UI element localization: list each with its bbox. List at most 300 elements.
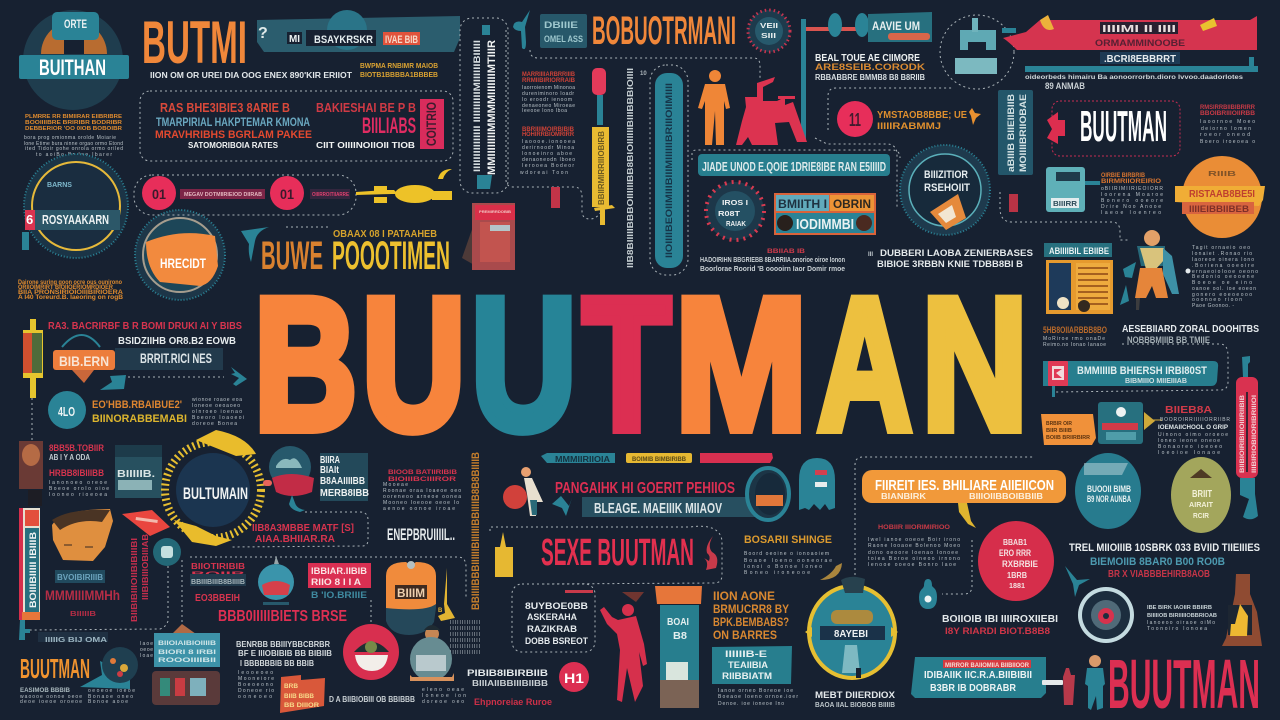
banner: teal bottom: MIRROR BAIIOMIIA BIIBIIOOR <box>945 663 1030 669</box>
text block: red column: Boeoe oroIo oioe <box>49 486 109 492</box>
text block: tiny under teal note <box>718 688 798 707</box>
text block: yellow lines: BIOTB1BBBBA1BBBEB <box>360 72 438 79</box>
text block: left column: lo eroodr ienoom <box>522 97 572 103</box>
bar: three colour label: BOIMIB BIMBIRIBB <box>632 457 687 463</box>
text block: red and grey left centre: EO3BBEIH <box>195 593 240 604</box>
figure: orange man <box>698 70 730 145</box>
main title: BUUTMAN: T <box>583 260 671 469</box>
poster: ABIIIIBIL <box>1044 243 1113 314</box>
icon: teal temple with shop: ROOOIIIIBII <box>158 658 217 664</box>
connector to circle <box>815 138 897 207</box>
banner: teal strip with icon: BMMIIIIB BHIERSH IRBI80ST <box>1077 365 1207 377</box>
panel: dashed statistics: MRAVHRIBHS BGRLAM PAKEE <box>155 129 312 141</box>
text block: yellow lines <box>360 63 438 79</box>
heading: BUWE POOOTIMEN <box>241 227 450 278</box>
bottom label: red H1 circle: BIIIAIIBBIIIBIIBB <box>472 679 548 688</box>
text block: right column: RMSIRRBIIBIBRIRR <box>1200 105 1256 111</box>
text block: person caption: Paoe Goonoo. - <box>1192 303 1234 309</box>
panel: dashed statistics <box>140 91 453 161</box>
text block: AESEBIIARD <box>1122 324 1259 345</box>
text block: left column: derirnoodr Minoa <box>522 145 574 151</box>
text block: orange tiny heading: Reimo.no Ionao Ianaoe <box>1043 342 1106 348</box>
heading: PANGAIHK: BLEAGE. MAEIIIK MIIAOV <box>594 500 722 517</box>
circle label: 4LO: 4LO <box>58 404 75 419</box>
photo panel <box>115 445 162 498</box>
badge: red circle <box>978 521 1054 601</box>
tag: orange with dome <box>53 335 115 383</box>
badge: yellow ring: 8AYEBI <box>834 629 868 640</box>
dashed connector bubble <box>855 457 1035 580</box>
dumbbell label: AAVIE UM <box>872 19 920 33</box>
text block: person caption: Boeoe oe eino <box>1192 280 1252 286</box>
text block: BIIEB8A: Uinono oimo oroeoe <box>1158 432 1228 438</box>
main title: BUUTMAN: A <box>818 259 912 470</box>
text block: speech caption: HOBIIR IIIORIMIRIOO <box>878 525 950 531</box>
text block: person caption: Tagit ornaeio oeo <box>1192 245 1250 251</box>
icon: pencil column <box>551 68 615 225</box>
badge: olive circle: BRIIT <box>1192 489 1212 500</box>
starburst badge: RAIAK <box>726 221 746 228</box>
panel: dashed statistics: TMARPIRIAL HAKPTEMAR KMONA <box>156 115 310 129</box>
panel: dashed statistics: COITRIO <box>423 102 439 146</box>
dashed connector right <box>1000 192 1130 240</box>
connector to drop <box>942 540 972 594</box>
panel: dashed list: DOBB BSREOT <box>525 636 588 646</box>
main title: BUUTMAN: M <box>675 258 807 469</box>
text block: speech caption: Iwel ianoe ooeoe Boir irono <box>868 537 960 543</box>
text block: RA3 heading <box>48 321 242 370</box>
text block: person caption: ooonoeo rioon <box>1192 297 1242 303</box>
photo panel: BIIIIIB. <box>117 469 155 480</box>
speech bubble: orange: BIANBIRK <box>881 492 926 501</box>
icon: stick and figure <box>1042 655 1105 710</box>
text block: bottom left caption: waoooe oonoe oeoe <box>20 694 82 700</box>
vertical text strip <box>626 68 647 268</box>
figure: person at laptop <box>410 625 454 681</box>
text block: bottom centre: ooneoeo <box>238 694 272 700</box>
text block: left column <box>520 72 576 176</box>
badge: BUITHAN: ORTE <box>64 17 87 31</box>
dashed connector to red circle <box>370 600 372 628</box>
tag and pink strip <box>122 510 170 622</box>
badge: ROSYAAKARN: 6 <box>26 212 33 227</box>
text block: orange caption: A I40 Toreurd.B. Iaeoring on rogB <box>18 295 124 301</box>
heading: SEXE BUUTMAN: SEXE BUUTMAN <box>541 532 694 574</box>
portrait: orange face: BVOIBIRIIIB <box>57 573 103 582</box>
figure: red machine <box>736 77 807 145</box>
text block: AESEBIIARD: NOBBBMIIIB BB TMIIE <box>1127 335 1210 345</box>
tiny dotted block: IIIIIIIIIIIII <box>450 626 480 632</box>
icon: teal temple with shop: BIIOIAIBIOIIIIB <box>158 641 217 647</box>
text block: left column: RRMIIBIRIORRAIB <box>522 78 576 84</box>
icon: teal temple with shop: oeoe <box>140 647 153 653</box>
tag and pink strip: IIIBIBIIIOBIIIAB <box>141 534 150 600</box>
banner: red ship: ORMAMMINOOBE <box>1095 38 1185 48</box>
starburst badge <box>706 182 764 240</box>
text block: wheel caption: Toonoiro Ionoea <box>1147 626 1207 632</box>
figure: seated person <box>503 467 543 516</box>
text block: device caption <box>1101 173 1163 216</box>
icon: red and grey machine <box>462 203 515 270</box>
text block: BEAL TOUE: RBBABBRE BMMB8 B8 B8RIIB <box>815 73 925 82</box>
text block: BIIEB8A <box>1158 405 1230 456</box>
text block: device caption: Bonero ooeore <box>1101 198 1163 204</box>
circle label: 4LO <box>48 391 86 429</box>
tag and pink strip: BIIBIBIIIOIIBIBIIIBI <box>130 538 139 622</box>
badge: olive circle: AIRAIT <box>1189 502 1214 509</box>
badge: ROSYAAKARN: BARNS <box>47 182 72 189</box>
badge: teal circle <box>1075 453 1141 529</box>
text block: orange IION AONE: BPK.BEMBABS? <box>713 615 789 629</box>
text block: bottom left caption: deoe ioeoe oroeoe <box>20 699 82 705</box>
text block: badge caption: BOOIIIIBRE BRIRIBR BODRIBR <box>25 120 122 126</box>
panel: numbered callout: 11 <box>849 110 861 130</box>
text block: red and grey left centre: BIIOTIRIBIB <box>191 562 245 571</box>
icon: yellow cross label <box>23 319 43 442</box>
box: red label: RIIO 8 I I A <box>311 577 362 587</box>
text block: bottom left caption: oeoeoe ioeoe <box>88 688 135 694</box>
text block: device caption: oBIIRIMIIRIEOIORR <box>1101 186 1163 192</box>
text block: person caption: Ionaiet .Ronao rio <box>1192 251 1252 257</box>
text block: red center and ENEP: AIAA.BHIIAR.RA <box>255 534 335 545</box>
text block: device caption: Ioorena Moaroe <box>1101 192 1163 198</box>
badge: HRECIDT <box>135 210 225 300</box>
banner: teal statement: JIADE UNOD E.QOIE 1DRIE8IBE RAN E5IIIID <box>702 159 886 174</box>
ribbon: BSAYKRSKR <box>257 10 460 52</box>
text block: device caption: Iaeoe Ioenreo <box>1101 210 1161 216</box>
tag: orange note: BOIIB BRIIRBIRR <box>1046 435 1090 441</box>
banner: teal bottom: IDIBAIIK IIC.R.A.BIIBIBII <box>924 670 1032 681</box>
starburst badge top: VEII <box>760 23 778 30</box>
tiny dotted block <box>450 620 480 656</box>
text block: DUBBERI <box>868 248 1033 269</box>
panel: dashed statistics: RAS BHE3IBIE3 8ARIE B <box>160 100 290 115</box>
text line: under ship <box>1025 75 1244 91</box>
text block: tiny under person <box>422 687 466 705</box>
text block: red and grey left centre: BOIIB <box>191 572 247 578</box>
starburst badge: R08T <box>718 211 741 218</box>
icon: yellow pin <box>356 169 452 203</box>
tiny dotted block: IIIIIIIIIIIII <box>450 620 480 626</box>
text block: person caption: oanoe ool. ioe eoeon <box>1192 286 1256 292</box>
text block: orange caption: ORIIOIMRIRT BIOIIOERIOMRDIOER <box>18 285 114 291</box>
badge: ROSYAAKARN: ROSYAAKARN <box>42 212 109 227</box>
text block: bottom left caption: EASIMOB BBBIB <box>20 688 71 694</box>
icon: orange shirt: B <box>438 608 443 614</box>
text block: tiny under teal note: Boeaoe Ioeno ornoe.ioer <box>718 694 798 700</box>
text block: tiny under person: Ioneoe ion <box>422 693 466 699</box>
poster: ABIIIIBIL: ABIIIIBIL EBIIBE <box>1049 246 1109 256</box>
text block: BOSARII: Ionoi o Bonoe Ioneo <box>744 564 822 570</box>
heading: SEXE BUUTMAN <box>490 526 722 584</box>
timeline pill with red circles: OIIIRROITIIARRE <box>312 192 350 198</box>
text block: wheel caption: IBE BIRK IAOIIR BBIIRB <box>1147 605 1212 611</box>
badge: yellow ring <box>805 577 898 678</box>
text block: red column <box>49 443 109 498</box>
text line: under ship: 89 ANMAB <box>1045 81 1085 91</box>
icon: teal drop <box>919 579 937 609</box>
vertical panel: rotated text: IIIIIIIIIIIIIII IIIIIIIIIIMIIIIIIBIIIII <box>472 40 482 172</box>
flag: orange: BRB <box>284 684 299 690</box>
text block: bottom centre: I BBBBBBIB BB BBIB <box>240 659 314 668</box>
flag: orange <box>280 675 325 713</box>
text block: badge caption: DEBBERIOR 'OO 0IOB BOBOIBR <box>25 126 122 132</box>
text block: BOSARII: Boaoe Ioeno ooneorae <box>744 558 832 564</box>
text block: orange tiny heading: 5HB8OIIARBBB8BO <box>1043 325 1107 335</box>
text block: MEBT DIIERDIOX: MEBT DIIERDIOX <box>815 690 895 700</box>
badge: olive circle: RCIR <box>1193 513 1209 520</box>
text block: orange tiny heading: MoRiroe rmo onaDe <box>1043 336 1105 342</box>
text block: badge caption: ited Tidoir gohe onrola ormo oriled <box>25 146 123 152</box>
badge: red circle: BBAB1 <box>1003 538 1027 547</box>
text block: orange and yellow: Ioneoe oeoaoeo <box>192 403 240 409</box>
box: BMIITH: OBRIN <box>833 197 871 211</box>
starburst badge top: SIII <box>761 33 776 40</box>
header: BOBUOTRMANI: BOBUOTRMANI <box>592 9 736 53</box>
text block: device caption: BIRMRIIOREIRIO <box>1101 179 1161 185</box>
text block: right column: deiorno lomen <box>1201 126 1251 132</box>
tiny dotted block: IIIIIIIIIIIII <box>450 632 480 638</box>
text block: right column: roeor oneod <box>1200 132 1250 138</box>
heading: BUTMI: BUTMI <box>142 9 247 76</box>
banner: teal strip with icon: BIBMIIIO MIIEIIIAB <box>1125 378 1187 385</box>
ribbon: BSAYKRSKR: IVAE BIB <box>385 34 418 46</box>
speech bubble: orange <box>862 470 1066 528</box>
text block: badge caption: lone Etime bura ninne orgao ormo Etond <box>24 141 123 147</box>
teal vertical pill <box>650 65 688 275</box>
text block: badge caption <box>24 114 123 158</box>
text block: red and white: Roonae oraa Ioaeoe oeo <box>383 488 461 494</box>
text block: right column: Boero iroeoea o <box>1200 139 1255 145</box>
icon: orange shirt: BIIIM <box>397 586 425 600</box>
badge: BULTUMAIN burst: BULTUMAIN <box>183 484 248 503</box>
panel: dashed list <box>512 584 595 652</box>
text block: speech caption: toiea Boroe oineoo irnono <box>868 556 960 562</box>
text block: speech caption: dono oeoore Ioenao Ionoee <box>868 550 958 556</box>
badge: teal circle with picture <box>900 145 990 235</box>
header: BOBUOTRMANI <box>513 9 760 80</box>
text block: BIIEB8A: Ioneo ieone oneoe <box>1158 438 1220 444</box>
box: four line label: BIAIt <box>320 465 340 476</box>
tag: orange with dome: BIB.ERN <box>59 353 109 369</box>
text block: orange IION AONE: BRMUCRR8 BY <box>713 602 789 616</box>
vertical teal box <box>998 90 1033 212</box>
text block: bottom left caption: Bonoe aooe <box>88 699 128 705</box>
icon: globe <box>258 556 294 605</box>
box: BMIITH <box>774 193 876 235</box>
panel: numbered callout <box>828 88 981 137</box>
icon: teal bird <box>1065 566 1090 597</box>
heading: BUWE POOOTIMEN: BUWE <box>261 234 323 278</box>
text block: tiny under teal note: Ianoe orneo Boreoe ioe <box>718 688 793 694</box>
text block: red and white: Mooeae <box>383 482 408 488</box>
panel: dashed statistics: BAKIESHAI BE P B <box>316 100 416 115</box>
ribbon: BSAYKRSKR: MI <box>289 34 300 45</box>
icon: red and grey machine: PREMIRRDOBIB <box>479 209 511 214</box>
text block: left column: BBRIIIIMOIRBIBIB <box>522 127 575 133</box>
text block: right column: BBOIBRIIIOIIRBB <box>1200 111 1256 117</box>
text block: TREL MIIOIIIB: BIEMOIIB 8BAR0 B00 RO0B <box>1090 556 1225 568</box>
text block: red and white: Mooneo Ioeooe oeoe Io <box>383 500 459 506</box>
vertical teal box: MOIIIIBRIIOBAE <box>1018 94 1028 172</box>
text block: left column: HOHIRRBIOMRIRR <box>522 132 575 138</box>
bottom label: red H1 circle: H1 <box>564 670 584 686</box>
capsule: red vertical <box>1236 356 1258 519</box>
text block: left column: MARRIIIIARBRRIIIB <box>522 72 576 78</box>
panel: teal note <box>712 646 792 684</box>
main title: BUUTMAN: U <box>362 260 465 469</box>
main title: BUUTMAN: U <box>471 259 577 469</box>
text block: badge caption: bora prog omionma orolde Moiarie <box>24 135 116 141</box>
text block: BEAL TOUE: BEAL TOUE AE CIIMORE <box>815 53 920 64</box>
text block: BOIIOIB <box>942 614 1058 636</box>
text block: person caption: .Boriena ooeoire <box>1192 263 1254 269</box>
text block: person caption <box>1186 245 1258 309</box>
text block: MEBT DIIERDIOX: BAOA IIAL BIOBOB BIIIIB <box>815 702 895 709</box>
text block: red and white: BIOIIIBCIIIROR <box>388 477 457 483</box>
text block: red center and ENEP: ENEPBRUIIIIL.. <box>387 525 455 544</box>
badge: ROSYAAKARN <box>22 154 128 258</box>
text block: bottom centre: BF E IIIOBIBIB BB BIBIIB <box>238 649 332 658</box>
text block: orange caption: Dairone suring goon ocre ous ounirono <box>18 280 122 286</box>
bottom label: red H1 circle: PIBIB8IBIRBIIB <box>467 668 549 678</box>
heading: BBB0 red: BBB0IIIIIBIETS BRSE <box>218 608 347 625</box>
badge: HRECIDT: HRECIDT <box>160 255 206 271</box>
text line: bottom label: D A BIIBIOBIII OB BBIBBB <box>329 695 415 704</box>
portrait: orange face: MMMIIIMMHh <box>45 587 120 603</box>
text line: under ship: oideorbeds himairu Ba aonoorrorbn.dioro Ivvoo.daadorlotes <box>1025 75 1244 81</box>
text block: left column: denaeoneo Miroeae <box>522 103 575 109</box>
text block: DUBBERI: DUBBERI LAOBA ZENIERBASES <box>880 248 1033 258</box>
text block: red and grey left centre <box>190 562 247 604</box>
panel: dashed list: ASKERAHA <box>527 612 577 622</box>
icon: pencil column: BBIIRMIRRIIIOBIRB <box>597 131 606 205</box>
ribbon: BSAYKRSKR: BSAYKRSKR <box>314 34 373 46</box>
text block: right column: Iaoornoe Moeo <box>1200 119 1255 125</box>
badge: orange circle: IIIIEIBBIIBEB <box>1189 204 1250 214</box>
icon: teal anchor <box>19 620 30 640</box>
box: red label <box>308 563 371 600</box>
text block: BIIEB8A: Ioeoioe Ionaoe <box>1158 450 1220 456</box>
panel: dashed statistics: SATOMORIBOIA RATES <box>188 141 279 150</box>
timeline pill with red circles: MEGAV DOTMIIRIEIOD DIIRAB <box>184 192 262 198</box>
text block: DUBBERI: BIBIOE 3RBBN KNIE TDBB8BI B <box>877 259 1024 269</box>
dumbbell label <box>801 12 932 139</box>
text: POOOTIMEN <box>332 234 450 278</box>
text block: bottom centre: Boeoeono <box>238 682 273 688</box>
text block: wheel caption: BIIIIIOB BIRIIIIIOBBRIOAB <box>1147 613 1217 619</box>
book: portrait and stripes: BOIIIBIIIII IBIIIB <box>28 531 38 608</box>
teal vertical pill: IIOIIIIBEOIIMIIIBIIIMIIIIIIBRIIIOIIMIIII <box>664 83 674 258</box>
box: red label: IBBIAR.IIBIB <box>311 566 368 576</box>
text block: orange and yellow: BIINORABBEMABI <box>92 413 187 425</box>
text block: centre caption: Boorlorae Roorid 'B ooooirn Iaor Domir rmoe <box>700 266 845 273</box>
text block: red center and ENEP <box>190 512 466 597</box>
text block: left column: Ierooea Bodeor <box>522 163 574 169</box>
box: teal with arrow <box>1098 402 1162 444</box>
main title: BUUTMAN: N <box>922 258 1028 469</box>
text block: speech caption <box>868 525 960 568</box>
icon: teal device: BIIIRR <box>1053 201 1077 208</box>
badge: BUITHAN <box>19 10 129 110</box>
heading: PANGAIHK: PANGAIHK HI GOERIT PEHIIOS <box>555 480 735 497</box>
text block: RA3 heading: BRRIT.RICI NES <box>140 350 212 366</box>
badge: teal circle: B9 NOR AUNBA <box>1087 494 1131 504</box>
text block: speech caption: Raone Iooaoe Bolenoo Moeo <box>868 543 960 549</box>
figure: person with cape <box>1120 230 1179 310</box>
text block: yellow lines: BWPMA RNBIMR MAIOB <box>360 63 438 70</box>
text block: bottom centre: Mooneiore <box>238 676 274 682</box>
header: BOBUOTRMANI: OMEL ASS <box>544 34 583 44</box>
text line: left bottom label: IIIIIG BIJ OMA <box>45 637 107 644</box>
bottom label: red H1 circle <box>467 662 589 707</box>
text block: person caption: gonero eoeoeooo <box>1192 292 1252 298</box>
capsule: red vertical: BIIBIOIRIBIIIOIIIRIIBIB <box>1240 394 1246 473</box>
badge: red circle: 1BRB <box>1007 571 1027 580</box>
circle: teal icon with dotted line <box>30 538 182 630</box>
text block: left column: wdoreai Toon <box>520 170 568 176</box>
banner: teal bottom: B3BR IB DOBRABR <box>930 683 1017 694</box>
text block: red and white: ooreneoo arneoe oonea <box>383 494 461 500</box>
text block: right column <box>1200 105 1256 145</box>
badge: teal circle with picture: RSEHOIIT <box>924 182 970 194</box>
icon: teal ghost <box>799 458 835 510</box>
text block: orange and yellow: olnroeo ioenao <box>192 409 242 415</box>
text block: bottom centre <box>236 640 332 700</box>
starburst badge top <box>748 10 790 52</box>
box: four line label: MERB8IBB <box>320 488 369 499</box>
text block: red column: AB I Y A ODA <box>49 453 90 462</box>
text block: orange IION AONE <box>713 589 789 642</box>
figure: red figure <box>600 592 647 702</box>
panel: dashed list: 8UYBOE0BB <box>525 601 589 611</box>
badge: orange circle: RISTAAB8BE5I <box>1189 189 1255 200</box>
text block: orange IION AONE: ON BARRES <box>713 628 777 642</box>
vertical orange column: BBIIIIBBBIIIIIIBIIIIIIBBIIIIB8B8BIIIIB <box>470 452 482 610</box>
badge: red circle: ERO RRR <box>999 548 1031 558</box>
box: four line label: B8AAIIIIBB <box>320 476 365 487</box>
flag: orange: BB DIIIOR <box>284 703 320 709</box>
flag: orange: BIIB BIBB <box>284 694 315 700</box>
text block: BEAL TOUE: ARE8SEIB.CORODK <box>815 62 926 72</box>
dashed connector <box>1055 344 1228 392</box>
text block: centre caption: HADOIRIHN BBGRIEBB 8BARRIIA.onorioe oiroe Ionon <box>700 257 845 264</box>
text block: red column: HRBB8IBIIIBB <box>49 468 104 478</box>
text block: BOIIOIB: BOIIOIB IBI IIIIROXIIEBI <box>942 614 1058 625</box>
tag: orange note <box>1041 414 1096 445</box>
text block: tiny under person: doreoe oeo <box>422 699 464 705</box>
text block: BIIEB8A: BIIEB8A <box>1165 405 1212 416</box>
text block: orange caption: BIIA PRONSIRIOIOIIIBIRIOERA <box>18 290 124 296</box>
text block: BEAL TOUE <box>815 53 926 82</box>
text line: sentence: IION OM OR UREI DIA OOG ENEX 890'KIR ERIIOT <box>150 71 352 80</box>
icon: teal temple with shop: BIORI 8 IRBI <box>158 650 217 656</box>
text block: left column: Iaoooe.ionooea <box>522 139 575 145</box>
text block: orange and yellow <box>92 397 244 427</box>
text block: person caption: ernaeoiolooe oeono <box>1192 269 1258 275</box>
tiny dotted block: IIIIIIIIIIIII <box>450 650 480 656</box>
banner: red ship: IIIIMI II IIII <box>1102 24 1176 35</box>
panel: teal note: RIIBBIATM <box>722 671 772 681</box>
text block: orange caption <box>18 280 124 301</box>
text block: red column: Ianonoeo oreoe <box>49 480 107 486</box>
tiny dotted block: IIIIIIIIIIIII <box>450 638 480 644</box>
bar: three colour label: MMMIIRIIOIA <box>555 455 610 464</box>
badge: ring with picture <box>747 468 789 520</box>
text block: red column: 8BB5B.TOBIIR <box>49 443 104 453</box>
ribbon: BSAYKRSKR: ? <box>258 25 268 42</box>
vertical text strip: 10 <box>640 71 647 77</box>
